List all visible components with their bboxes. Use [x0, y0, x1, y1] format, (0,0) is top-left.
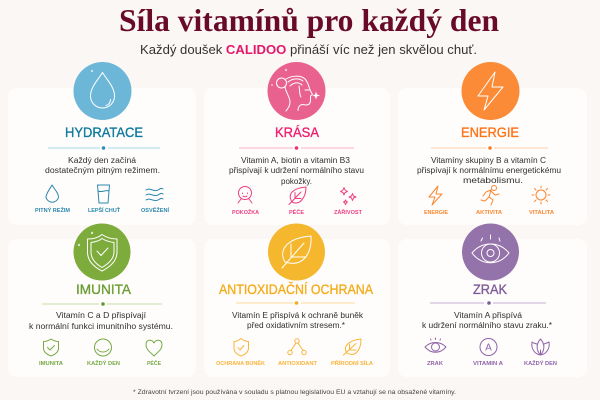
panel: zrak [398, 224, 587, 377]
icon: glass [98, 185, 110, 203]
icon: shield [44, 339, 58, 356]
text block: dostatečným pitným režimem. [45, 166, 160, 175]
icon: sparkles [340, 188, 356, 204]
icon: molecule [288, 339, 306, 355]
labels: KAŽDÝ DEN [87, 359, 120, 367]
text block: přispívají k udržení normálního stavu [229, 166, 364, 175]
labels: ENERGIE [424, 210, 448, 216]
text block: Vitamín C a D přispívají [56, 311, 147, 320]
icon: water drop badge [74, 62, 132, 120]
divider [430, 301, 546, 305]
heading: ANTIOXIDAČNÍ OCHRANA [219, 281, 374, 297]
divider [236, 301, 355, 305]
icon: face [238, 186, 252, 203]
heading: KRÁSA [275, 124, 320, 140]
labels [39, 359, 161, 367]
text block: k normální funkci imunitního systému. [29, 322, 173, 331]
labels [424, 210, 554, 216]
icon: eye badge [462, 224, 519, 280]
panel: energie [398, 62, 587, 225]
icon: shield badge [74, 224, 130, 280]
divider [42, 302, 162, 306]
icon: leaf [344, 339, 361, 355]
text block: přispívají k normálnímu energetickému [417, 166, 561, 175]
labels: PITNÝ REŽIM [35, 206, 71, 214]
icon: waves [146, 188, 163, 201]
text block [29, 311, 173, 331]
text block: pokožky. [281, 177, 312, 186]
icon: face badge [268, 62, 326, 120]
labels [427, 359, 557, 367]
heading: HYDRATACE [65, 124, 143, 140]
divider [431, 146, 548, 150]
icon: heart [146, 340, 162, 356]
icon: lightning badge [462, 62, 520, 120]
labels [232, 208, 363, 216]
divider [48, 146, 160, 150]
icon: shield [234, 338, 248, 356]
text block: před oxidativním stresem.* [247, 321, 345, 330]
text block [422, 311, 552, 330]
text block: metabolismu. [463, 176, 523, 185]
text block: Vitamin A, biotin a vitamin B3 [241, 156, 351, 165]
divider [239, 146, 354, 150]
icon: eye [425, 338, 446, 352]
footnote: * Zdravotní tvrzení jsou používána v souladu s platnou legislativou EU a vztahují se na obsažené vitamíny. [133, 389, 456, 396]
text block: k udržení normálního stavu zraku.* [422, 321, 552, 330]
labels: LEPŠÍ CHUŤ [88, 206, 121, 214]
labels: PŘÍRODNÍ SÍLA [331, 359, 373, 367]
labels: PÉČE [289, 208, 304, 216]
labels: OSVĚŽENÍ [141, 206, 170, 214]
icon: lotus [532, 339, 549, 355]
labels: ANTIOXIDANT [278, 361, 318, 367]
icon: leaf [289, 187, 306, 204]
heading: ZRAK [473, 281, 508, 297]
panel: hydratace [8, 62, 196, 225]
labels: VITAMIN A [473, 361, 503, 367]
labels: OCHRANA BUNĚK [216, 359, 265, 367]
labels: AKTIVITA [476, 210, 502, 216]
text block [232, 311, 364, 330]
subtitle: Každý doušek CALIDOO přináší víc než jen skvělou chuť. [140, 42, 477, 57]
labels: ZÁŘIVOST [334, 208, 363, 216]
text block [45, 156, 160, 175]
panel: antioxidacni ochrana [204, 224, 390, 377]
labels: POKOŽKA [232, 208, 259, 216]
heading: IMUNITA [76, 281, 132, 297]
title: Síla vitamínů pro každý den [119, 2, 499, 38]
icon: sun [532, 186, 550, 204]
text block: Vitamín A přispívá [454, 311, 523, 320]
icon: vitamin a [480, 338, 497, 356]
icon: smile [94, 339, 112, 356]
icon: drop [46, 185, 58, 202]
text block: Vitamíny skupiny B a vitamín C [431, 156, 546, 165]
icon: bolt [429, 186, 442, 205]
text block: Každý den začíná [68, 156, 137, 165]
labels: IMUNITA [39, 361, 63, 367]
text block [229, 156, 364, 186]
text block: Vitamín E přispívá k ochraně buněk [232, 311, 364, 320]
labels: ZRAK [427, 361, 443, 367]
labels [216, 359, 373, 367]
icon: leaf badge [268, 224, 325, 280]
labels [35, 206, 170, 214]
heading: ENERGIE [461, 124, 519, 140]
labels: PÉČE [147, 359, 161, 367]
panel: imunita [8, 224, 196, 377]
icon: runner [481, 186, 499, 205]
labels: VITALITA [529, 210, 554, 216]
panel: krasa [204, 62, 390, 225]
icon: vitamin a: A [485, 342, 492, 354]
labels: KAŽDÝ DEN [524, 359, 557, 367]
text block [417, 156, 561, 185]
